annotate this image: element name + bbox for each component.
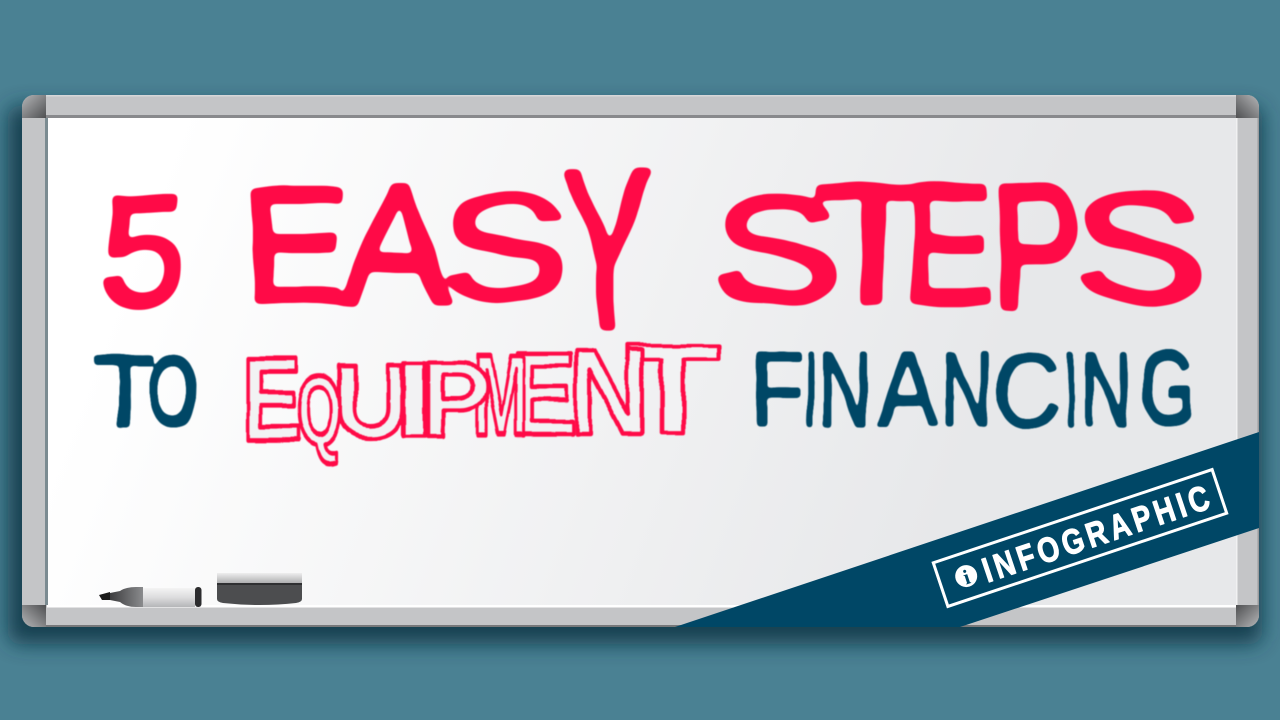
subtitle word: FINANCING: N: [819, 331, 872, 449]
subtitle word: FINANCING: F: [749, 330, 804, 449]
writing surface: [47, 117, 1237, 606]
word: EASY: A: [344, 148, 450, 340]
subtitle word: EQUIPMENT: E: [512, 327, 576, 459]
infographic stamp: [933, 470, 1227, 606]
stamp border: [933, 470, 1227, 606]
corner top right: [1236, 95, 1259, 118]
word: EASY: Y: [562, 125, 652, 376]
word: STEPS: T: [816, 149, 932, 340]
word: STEPS: P: [991, 148, 1084, 349]
subtitle word: EQUIPMENT: Q: [296, 354, 343, 467]
subtitle word: EQUIPMENT: E: [242, 333, 301, 466]
icon: eraser: [217, 573, 302, 605]
icon: info circle: i: [960, 565, 973, 589]
frame edge lines: [45, 95, 1259, 627]
word: STEPS: S: [711, 162, 841, 335]
word: EASY: [242, 125, 652, 376]
icon: info circle: [952, 562, 981, 592]
subtitle word: TO: T: [91, 334, 156, 448]
subtitle word: FINANCING: G: [1140, 329, 1193, 448]
word: 5: 5: [101, 161, 187, 339]
subtitle word: TO: O: [148, 336, 199, 446]
subtitle word: FINANCING: N: [1081, 331, 1132, 449]
whiteboard: [22, 95, 1259, 627]
corner bottom left: [22, 605, 46, 627]
subtitle word: EQUIPMENT: N: [569, 323, 650, 460]
subtitle word: FINANCING: I: [1064, 330, 1079, 449]
word: STEPS: [711, 148, 1204, 349]
subtitle word: EQUIPMENT: P: [421, 341, 490, 460]
icon: marker pen: [99, 587, 202, 607]
subtitle word: FINANCING: A: [877, 331, 939, 449]
subtitle word: EQUIPMENT: T: [625, 318, 720, 462]
word: EASY: E: [242, 153, 348, 338]
word: EASY: S: [438, 165, 572, 332]
banner: [675, 432, 1259, 627]
word: STEPS: S: [1074, 162, 1204, 335]
subtitle word: TO: [91, 334, 199, 448]
subtitle word: FINANCING: [749, 329, 1193, 449]
corner bottom right: [1236, 605, 1259, 627]
title: 5 EASY STEPS: [101, 125, 1204, 376]
subtitle word: EQUIPMENT: U: [334, 343, 409, 460]
board frame: [22, 95, 1259, 627]
word: STEPS: E: [905, 149, 995, 339]
subtitle word: FINANCING: N: [941, 331, 992, 449]
subtitle word: EQUIPMENT: I: [394, 341, 435, 460]
subtitle word: FINANCING: C: [992, 331, 1061, 449]
subtitle word: FINANCING: I: [804, 330, 819, 449]
stamp text: INFOGRAPHIC: [977, 477, 1215, 590]
whiteboard shadow: [8, 106, 1262, 644]
corner top left: [22, 95, 46, 118]
subtitle word: EQUIPMENT: M: [474, 331, 528, 460]
subtitle word: EQUIPMENT: [242, 318, 720, 467]
